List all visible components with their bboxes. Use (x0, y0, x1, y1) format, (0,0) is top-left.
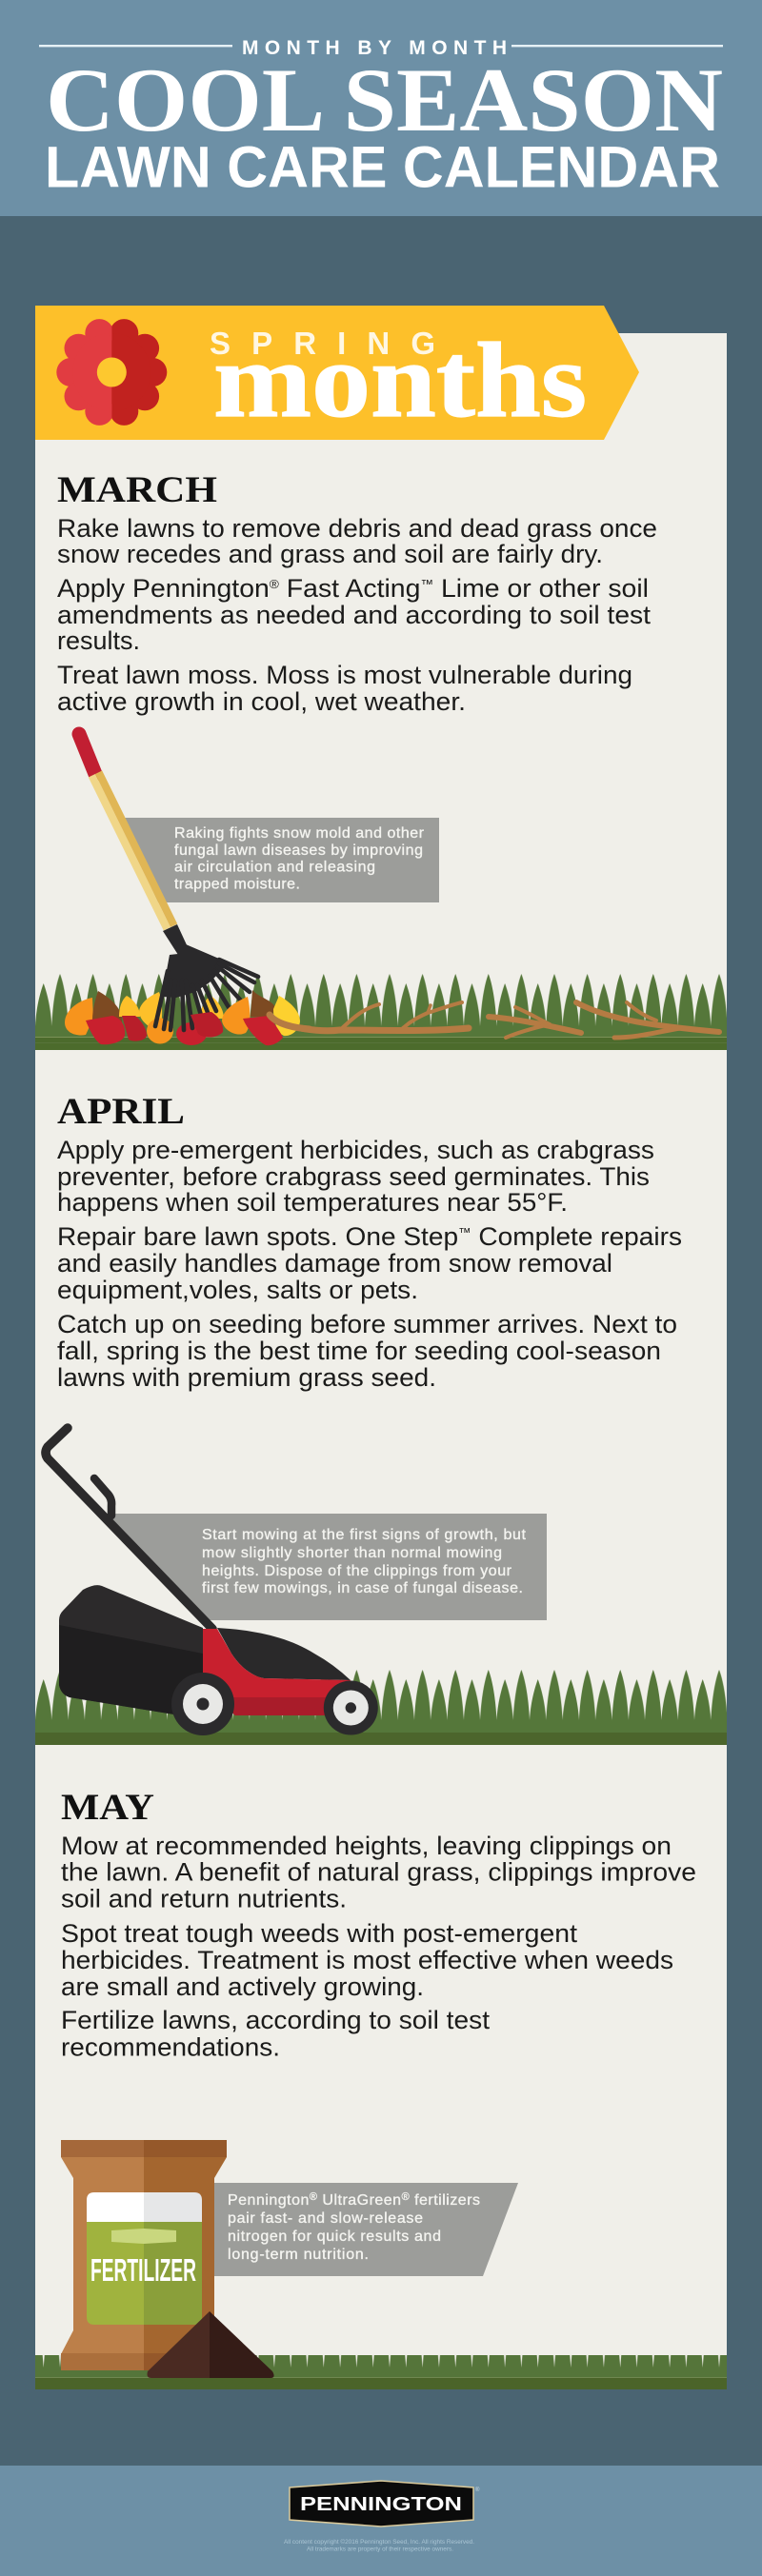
banner label: spring: SPRING (210, 326, 435, 361)
text block: april tasks: Catch up on seeding before summer arrives. Next to (57, 1310, 677, 1338)
text block: april tasks: ™ (458, 1225, 471, 1239)
icon: soil pile (147, 2311, 274, 2378)
callout: mowing (104, 1514, 547, 1620)
callout: fertilizer: fertilizers (410, 2192, 480, 2209)
banner label: months: months (213, 322, 587, 440)
text block: april tasks: Apply pre-emergent herbicides, such as crabgrass (57, 1136, 654, 1164)
text block: march tasks: amendments as needed and according to soil test (57, 601, 652, 629)
callout: mowing: Start mowing at the first signs of growth, but (202, 1527, 527, 1543)
callout: fertilizer (213, 2183, 518, 2276)
grass strip: march (35, 974, 727, 1050)
header band (0, 0, 762, 216)
title: lawn care calendar: LAWN CARE CALENDAR (45, 135, 720, 200)
text block: march tasks (57, 514, 657, 716)
leaves in front of rake (86, 990, 310, 1045)
text block: march tasks: Treat lawn moss. Moss is most vulnerable during (57, 661, 632, 689)
logo: pennington: ® (475, 2487, 480, 2493)
grass strip: may (35, 2355, 727, 2389)
text block: may tasks: the lawn. A benefit of natural grass, clippings improve (61, 1858, 696, 1887)
kicker: month by month: MONTH BY MONTH (242, 37, 507, 59)
callout: raking: Raking fights snow mold and other (174, 825, 425, 842)
logo: pennington: PENNINGTON (300, 2493, 462, 2515)
callout: mowing: heights. Dispose of the clippings from your (202, 1563, 512, 1579)
copyright (284, 2538, 474, 2553)
logo: pennington (290, 2481, 480, 2526)
section: april (35, 1091, 727, 1745)
text block: march tasks: active growth in cool, wet weather. (57, 687, 466, 716)
callout: mowing: first few mowings, in case of fungal disease. (202, 1580, 523, 1596)
text block: march tasks: Apply Pennington (57, 574, 259, 603)
grass strip: april (35, 1670, 727, 1745)
copyright: All trademarks are property of their respective owners. (307, 2546, 453, 2553)
heading: march: MARCH (57, 469, 217, 510)
callout: fertilizer: ® (402, 2191, 410, 2203)
callout: raking (119, 818, 439, 902)
label panel (87, 2192, 202, 2325)
icon: lawn mower (46, 1428, 378, 1735)
title: cool season: COOL SEASON (46, 50, 723, 150)
heading: may: MAY (61, 1787, 154, 1828)
text block: april tasks: fall, spring is the best time for seeding cool-season (57, 1337, 661, 1365)
leaves behind rake (65, 991, 224, 1045)
footer band (0, 2466, 762, 2576)
callout: fertilizer: long-term nutrition. (228, 2247, 369, 2263)
text block: april tasks: equipment,voles, salts or pets. (57, 1276, 418, 1304)
text block: may tasks: herbicides. Treatment is most effective when weeds (61, 1946, 673, 1974)
text block: april tasks: preventer, before crabgrass seed germinates. This (57, 1162, 650, 1191)
text block: may tasks: are small and actively growing. (61, 1972, 424, 2001)
text block: may tasks (61, 1832, 696, 2062)
callout: fertilizer: UltraGreen (317, 2192, 401, 2209)
text block: may tasks: Mow at recommended heights, leaving clippings on (61, 1832, 672, 1860)
text block: march tasks: results. (57, 626, 140, 655)
callout: raking: fungal lawn diseases by improving (174, 842, 423, 859)
callout: fertilizer: ® (310, 2191, 317, 2203)
text block: april tasks: Complete repairs (471, 1222, 682, 1251)
text block: march tasks: ™ (420, 577, 433, 591)
callout: raking: trapped moisture. (174, 876, 300, 893)
icon: fertilizer bag (61, 2140, 227, 2370)
text block: april tasks (57, 1136, 682, 1392)
heading: april: APRIL (57, 1091, 185, 1132)
callout: raking: air circulation and releasing (174, 859, 375, 876)
text block: march tasks: Rake lawns to remove debris and dead grass once (57, 514, 657, 543)
section: may (35, 1787, 727, 2389)
text block: march tasks: ® (270, 577, 279, 591)
section: march (35, 469, 727, 1050)
icon: flower (56, 319, 167, 426)
text block: may tasks: recommendations. (61, 2033, 280, 2062)
callout: fertilizer: pair fast- and slow-release (228, 2210, 423, 2227)
banner: spring months (35, 306, 639, 440)
callout: fertilizer: nitrogen for quick results and (228, 2229, 441, 2245)
text block: april tasks: and easily handles damage from snow removal (57, 1249, 612, 1278)
callout: mowing: mow slightly shorter than normal mowing (202, 1545, 502, 1561)
copyright: All content copyright ©2016 Pennington Seed, Inc. All rights Reserved. (284, 2538, 474, 2546)
content panel (35, 333, 727, 2389)
text block: march tasks: Fast Acting (279, 574, 420, 603)
text block: may tasks: Fertilize lawns, according to soil test (61, 2006, 491, 2034)
text block: may tasks: Spot treat tough weeds with post-emergent (61, 1919, 578, 1948)
text block: march tasks: snow recedes and grass and soil are fairly dry. (57, 540, 603, 568)
icon: rake (79, 734, 258, 1030)
text block: april tasks: Repair bare lawn spots. One Step (57, 1222, 443, 1251)
text block: may tasks: soil and return nutrients. (61, 1885, 347, 1913)
branches (270, 1002, 719, 1038)
text block: april tasks: lawns with premium grass seed. (57, 1363, 436, 1392)
callout: fertilizer: Pennington (228, 2192, 309, 2209)
bag label text: FERTILIZER (90, 2253, 196, 2289)
text block: march tasks: Lime or other soil (433, 574, 649, 603)
text block: april tasks: happens when soil temperatures near 55°F. (57, 1188, 568, 1217)
